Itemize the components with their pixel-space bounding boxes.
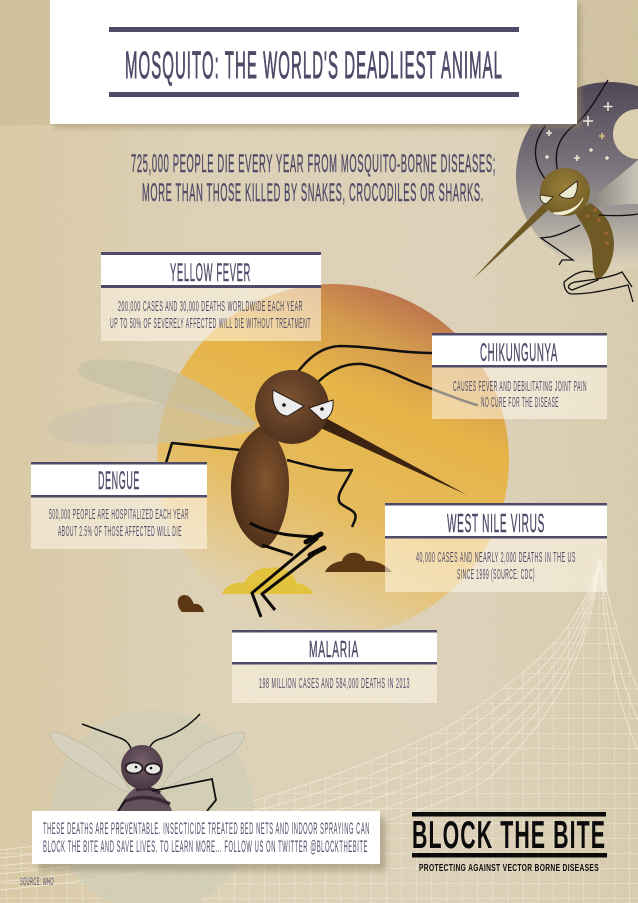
panel: malaria: MALARIA (309, 636, 359, 662)
illustration: central mosquito (47, 346, 477, 617)
panel: yellow fever (101, 252, 321, 341)
body (118, 785, 172, 811)
antennae (82, 714, 200, 752)
cloud: yellow (222, 567, 313, 594)
intro text (131, 150, 496, 207)
moon disc with stars (516, 82, 638, 270)
panel: yellow fever: YELLOW FEVER (170, 259, 251, 287)
head (540, 168, 590, 216)
call to action text (43, 819, 370, 856)
text: 200,000 CASES AND 30,000 DEATHS WORLDWIDE EACH YEAR (118, 299, 303, 315)
eyes (540, 181, 577, 204)
mouth (553, 198, 583, 215)
panel: malaria (232, 630, 437, 703)
cloud: brown (325, 553, 392, 572)
cloud: small brown (178, 595, 204, 612)
proboscis (473, 204, 548, 279)
antennae (535, 80, 608, 180)
body (231, 425, 289, 548)
feet (306, 534, 324, 555)
white net grid (0, 558, 638, 903)
description (453, 379, 587, 411)
arm (118, 779, 216, 811)
front legs (250, 523, 322, 617)
body stripes (126, 789, 170, 804)
illustration: bottom mosquito (50, 710, 254, 903)
pale disc (52, 710, 254, 903)
text: SOURCE: WHO (20, 876, 54, 888)
panel: west nile virus (385, 503, 607, 592)
text: 500,000 PEOPLE ARE HOSPITALIZED EACH YEAR (49, 507, 189, 523)
head (255, 370, 329, 444)
body spots (587, 210, 607, 243)
panel: dengue: DENGUE (98, 467, 140, 495)
proboscis (316, 416, 467, 495)
description (110, 299, 311, 332)
antennae (293, 346, 477, 405)
wing (588, 160, 638, 208)
head (121, 745, 163, 789)
panel: dengue (31, 462, 207, 549)
wings (47, 360, 257, 445)
legs (541, 214, 638, 302)
description (49, 507, 189, 540)
logo: block the bite (412, 812, 607, 874)
text: ABOUT 2.5% OF THOSE AFFECTED WILL DIE (58, 524, 182, 540)
panel: chikungunya (432, 333, 607, 419)
wings (50, 732, 245, 793)
illustration: top right mosquito (473, 80, 638, 302)
eyes (126, 762, 161, 774)
body (575, 203, 614, 280)
eyes (273, 390, 333, 420)
call to action panel (32, 811, 386, 871)
sun circle (157, 284, 509, 636)
description (416, 550, 576, 583)
back legs (166, 443, 356, 527)
title panel (50, 0, 581, 128)
